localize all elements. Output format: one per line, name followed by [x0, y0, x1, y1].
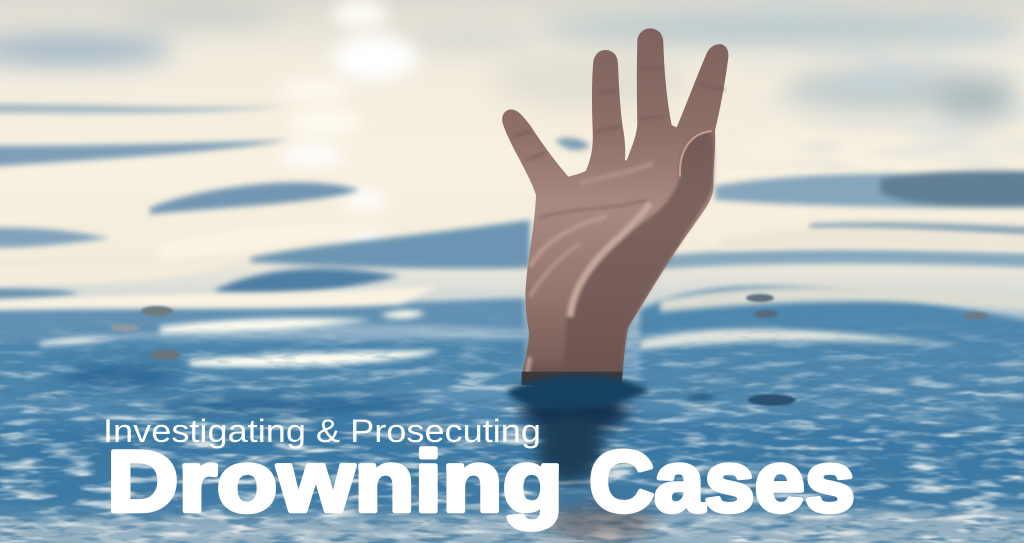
mottled haze on the right	[806, 53, 1024, 168]
dark water bands (blurred)	[0, 104, 1024, 425]
wrist waterline band	[522, 372, 623, 385]
thumb edge highlight	[680, 131, 712, 177]
heading text	[103, 413, 855, 530]
ripple texture	[0, 323, 1024, 543]
pale reflections on the water	[0, 224, 1024, 543]
title word: Drowning: Drowning	[107, 434, 563, 530]
sky haze tones at the top	[0, 4, 1020, 122]
water splash around the wrist	[505, 376, 713, 410]
icon: raised hand	[502, 28, 728, 385]
hand shading and palm creases	[513, 68, 725, 375]
dark shadow under the wrist	[60, 368, 655, 542]
title word: Cases: Cases	[589, 434, 855, 530]
sun glare highlights	[279, 1, 417, 244]
water droplets	[110, 294, 988, 406]
subtitle: Investigating & Prosecuting	[103, 413, 541, 449]
